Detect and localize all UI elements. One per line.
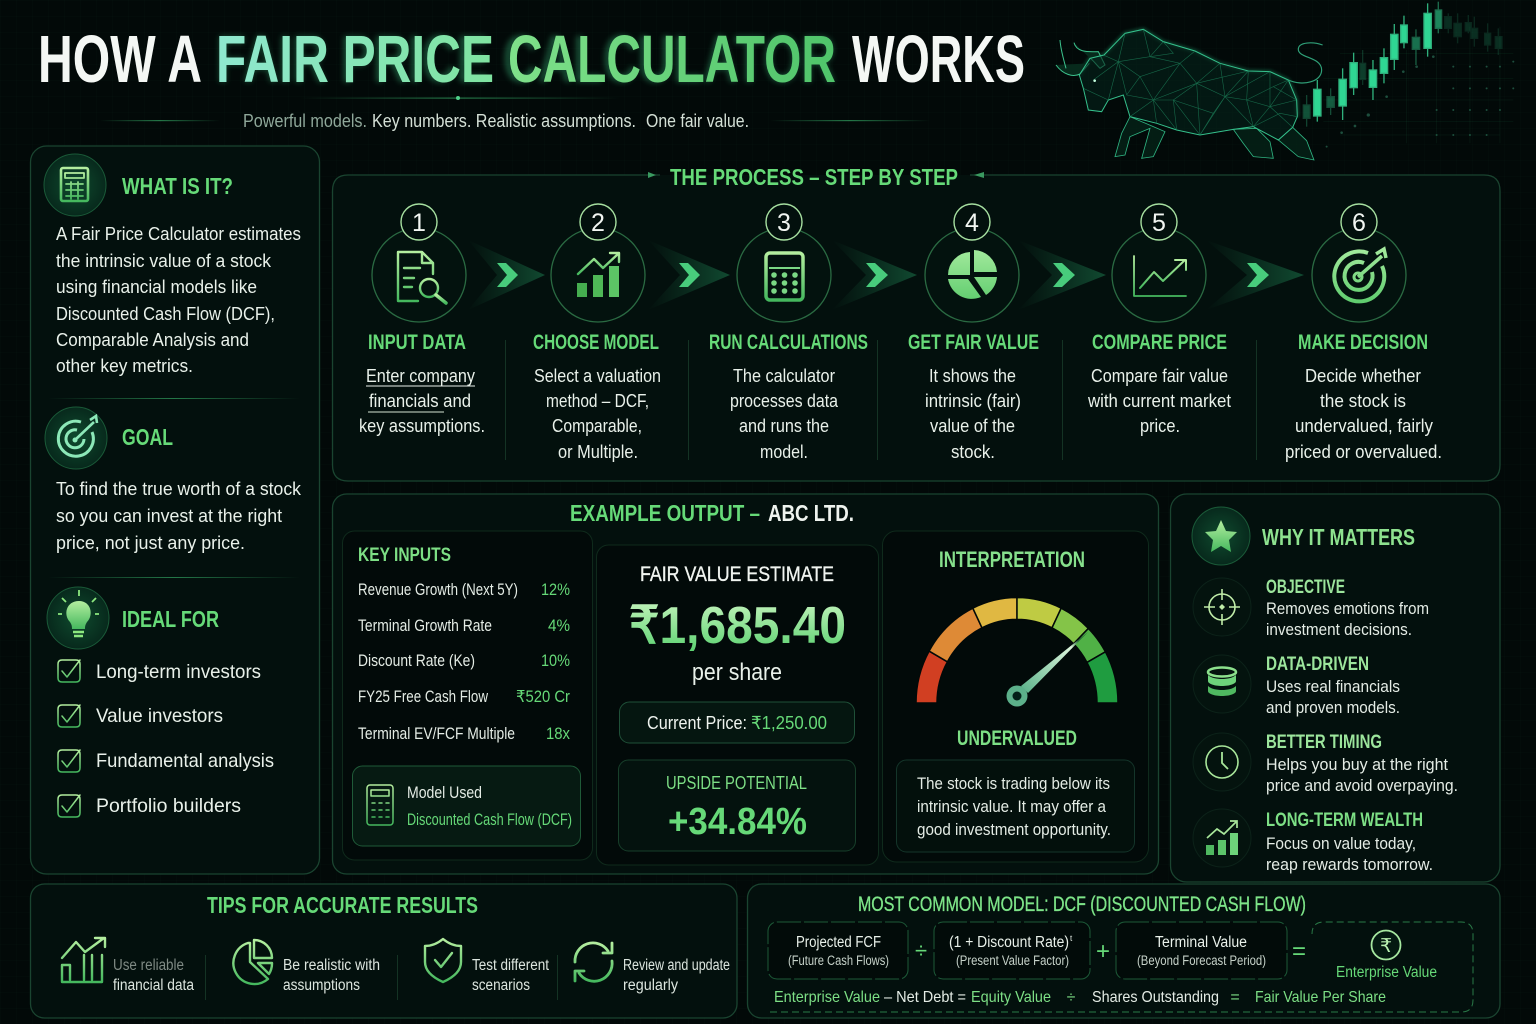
panel: why it matters: WHY IT MATTERS [1262,524,1415,550]
sub-panel: key inputs: KEY INPUTS [358,544,451,566]
sub-panel: key inputs [342,531,592,860]
card: interpretation: INTERPRETATION [939,547,1085,572]
step 2: choose model: Select a valuation [534,365,661,386]
title: WORKS [852,22,1025,97]
item: objective: Removes emotions from [1266,600,1429,618]
step 2: choose model: or Multiple. [558,441,638,462]
section: what is it: WHAT IS IT? [122,173,233,199]
sub-panel: key inputs: Discount Rate (Ke) [358,652,475,670]
step 3: run calculations: 3 [777,209,791,237]
step 3: run calculations: model. [760,441,808,462]
step 5: compare price: 5 [1152,209,1166,237]
checklist: ideal investors: Fundamental analysis [96,750,274,772]
icon: clock [1193,733,1251,791]
arrows between steps [468,240,1304,310]
formula line: fair value per share: – Net Debt = [884,989,966,1006]
checklist: ideal investors: Value investors [96,705,223,727]
checklist: ideal investors: Long-term investors [96,661,261,683]
tip: reliable data: Use reliable [113,957,184,974]
icon: target [45,407,107,469]
formula box: terminal value [1116,922,1287,979]
item: objective: OBJECTIVE [1266,577,1345,598]
icon: target with arrow [1334,249,1386,301]
item: long-term wealth [1193,809,1433,874]
step 1: input data: key assumptions. [359,415,485,436]
item: long-term wealth: Focus on value today, [1266,835,1416,853]
step 2: choose model: method – DCF, [546,390,649,411]
icon: database [1193,655,1251,713]
item: data-driven: Uses real financials [1266,678,1400,696]
item: data-driven: DATA-DRIVEN [1266,654,1369,675]
item: better timing [1193,732,1458,795]
section: what is it: Comparable Analysis and [56,329,249,350]
step 5: compare price: Compare fair value [1091,365,1228,386]
item: better timing: BETTER TIMING [1266,732,1382,753]
section: goal: price, not just any price. [56,532,245,553]
section: goal: To find the true worth of a stock [56,478,302,499]
icon: growth bars [1193,809,1251,867]
formula box: discount rate [934,922,1090,979]
tip: test scenarios: scenarios [472,977,530,994]
formula line: fair value per share [774,989,1386,1006]
step 2: choose model: CHOOSE MODEL [533,331,659,354]
formula line: fair value per share: ÷ [1067,989,1076,1006]
icon: line chart [1134,256,1186,296]
card: interpretation [882,531,1148,862]
step 1: input data: 1 [412,209,426,237]
icon: calculator [766,253,803,300]
section: what is it: the intrinsic value of a stock [56,250,272,271]
card: fair value estimate: ₹1,685.40 [629,597,846,655]
formula box: projected fcf: Projected FCF [796,934,881,951]
icon: document with magnifier [398,252,446,303]
operator: divide: ÷ [915,938,927,963]
icon: shield [425,939,461,982]
callout: interpretation text: intrinsic value. It may offer a [917,797,1106,816]
step 2: choose model [533,204,661,462]
step 2: choose model: 2 [591,209,605,237]
checklist: ideal investors [58,660,274,817]
panel: most common model: MOST COMMON MODEL: DCF (DISCOUNTED CASH FLOW) [858,893,1306,916]
callout: interpretation text: The stock is trading below its [917,774,1110,793]
formula box: discount rate: (Present Value Factor) [956,953,1069,968]
step 6: make decision: MAKE DECISION [1298,331,1428,354]
card: model used: Model Used [407,784,482,802]
step 1: input data [359,204,485,436]
item: long-term wealth: reap rewards tomorrow. [1266,856,1433,874]
tip: test scenarios: Test different [472,957,550,974]
subtitle: Key numbers. Realistic assumptions. [372,110,636,131]
icon: crosshair [1193,578,1251,636]
formula line: fair value per share: Equity Value [971,989,1051,1006]
sub-panel: key inputs: ₹520 Cr [516,688,570,706]
step 4: get fair value: value of the [930,415,1015,436]
tip: review regularly: Review and update [623,957,730,974]
card: fair value estimate: per share [692,659,782,686]
section: goal: GOAL [122,424,173,450]
sub-panel: key inputs: Terminal Growth Rate [358,617,492,635]
title: HOW A [38,22,202,97]
section: goal [45,407,302,553]
section: what is it: Discounted Cash Flow (DCF), [56,303,275,324]
subtitle: Powerful models. [243,110,367,131]
step 3: run calculations [709,204,868,462]
formula box: terminal value: (Beyond Forecast Period) [1137,953,1266,968]
sub-panel: key inputs: 4% [548,617,570,635]
operator: equals: = [1292,938,1306,965]
formula box: projected fcf: (Future Cash Flows) [788,953,889,968]
section: what is it [44,154,301,376]
callout: interpretation text: good investment opportunity. [917,820,1111,839]
card: fair value estimate [596,545,878,865]
step 5: compare price: price. [1140,415,1180,436]
section: ideal for: IDEAL FOR [122,606,219,632]
formula line: fair value per share: Fair Value Per Share [1255,989,1386,1006]
section: what is it: using financial models like [56,276,257,297]
formula line: fair value per share: Shares Outstanding [1092,989,1219,1006]
step 6: make decision: the stock is [1320,390,1406,411]
title: FAIR PRICE CALCULATOR [216,22,836,97]
step 4: get fair value: 4 [965,209,979,237]
icon: refresh [575,943,612,981]
step 1: input data: INPUT DATA [368,331,466,354]
current price: ₹1,250.00 [751,713,827,733]
card: model used [352,766,580,846]
result: enterprise value: Enterprise Value [1336,964,1437,981]
sub-panel: key inputs: 18x [546,725,571,743]
item: better timing: price and avoid overpaying. [1266,777,1458,795]
callout: interpretation text [896,760,1134,852]
formula box: discount rate: t [1070,934,1073,943]
operator: plus: + [1096,938,1110,965]
tip: realistic assumptions: Be realistic with [283,957,380,974]
step 6: make decision [1285,204,1442,462]
step 3: run calculations: processes data [730,390,839,411]
tip: review regularly: regularly [623,977,678,994]
step 4: get fair value: GET FAIR VALUE [908,331,1039,354]
section: goal: so you can invest at the right [56,505,282,526]
tip: realistic assumptions [233,940,380,994]
step 5: compare price: with current market [1087,390,1231,411]
heading: the process: THE PROCESS – STEP BY STEP [670,164,958,190]
item: objective [1193,577,1429,639]
step 6: make decision: 6 [1352,209,1366,237]
icon: star [1192,507,1250,565]
step 2: choose model: Comparable, [552,415,642,436]
sub-panel: key inputs: Revenue Growth (Next 5Y) [358,581,518,599]
title: CALCULATOR [508,22,836,97]
step 3: run calculations: and runs the [739,415,829,436]
current price: Current Price: [647,713,747,733]
result: enterprise value: ₹ [1380,936,1392,957]
item: objective: investment decisions. [1266,621,1412,639]
step 1: input data: Enter company [366,365,476,386]
tip: reliable data: financial data [113,977,194,994]
step 5: compare price: COMPARE PRICE [1092,331,1227,354]
step 6: make decision: priced or overvalued. [1285,441,1442,462]
upside potential: +34.84% [668,801,807,843]
gauge [916,597,1118,706]
current price [620,702,854,743]
result: enterprise value [1336,930,1437,981]
item: data-driven: and proven models. [1266,699,1400,717]
formula box: projected fcf [768,922,908,979]
heading: example output: EXAMPLE OUTPUT – [570,500,760,526]
tip: test scenarios [425,939,550,994]
step 4: get fair value: It shows the [929,365,1016,386]
step 3: run calculations: RUN CALCULATIONS [709,331,868,354]
tip: realistic assumptions: assumptions [283,977,360,994]
step 4: get fair value [908,204,1039,462]
title: FAIR PRICE [216,22,494,97]
upside potential: UPSIDE POTENTIAL [666,772,807,793]
upside potential [618,760,856,851]
panel: most common model [748,884,1500,1018]
icon: light bulb [47,587,109,649]
formula line: fair value per share: = [1230,989,1240,1006]
step 5: compare price [1087,204,1231,436]
step 4: get fair value: intrinsic (fair) [925,390,1021,411]
tip: review regularly [575,943,730,994]
step 3: run calculations: The calculator [733,365,835,386]
step 1: input data: financials and [369,390,471,411]
section: ideal for [47,587,274,817]
illustration: wireframe bull with candlesticks [1056,2,1514,160]
formula box: discount rate: (1 + Discount Rate) [949,934,1069,951]
card: fair value estimate: FAIR VALUE ESTIMATE [640,563,834,586]
panel: why it matters [1170,494,1500,882]
item: long-term wealth: LONG-TERM WEALTH [1266,810,1423,831]
section: what is it: A Fair Price Calculator estimates [56,223,301,244]
checklist: ideal investors: Portfolio builders [96,795,241,817]
formula box: terminal value: Terminal Value [1155,934,1247,951]
sub-panel: key inputs: 12% [541,581,570,599]
step 4: get fair value: stock. [951,441,995,462]
panel: example output [332,494,1158,874]
step 6: make decision: Decide whether [1305,365,1421,386]
tip: reliable data [62,938,194,994]
subtitle: One fair value. [646,110,749,131]
panel: left column [30,146,320,874]
card: model used: Discounted Cash Flow (DCF) [407,811,572,829]
heading: example output: ABC LTD. [768,500,854,526]
sub-panel: key inputs: 10% [541,652,570,670]
subtitle [100,96,930,131]
sub-panel: key inputs: FY25 Free Cash Flow [358,688,488,706]
panel: the process [332,164,1500,481]
formula line: fair value per share: Enterprise Value [774,989,880,1006]
item: better timing: Helps you buy at the right [1266,756,1448,774]
icon: bar chart with arrow [577,253,619,297]
icon: pie chart [233,940,272,984]
panel: tips for accurate results: TIPS FOR ACCURATE RESULTS [207,892,478,918]
icon: chart [62,938,105,982]
section: what is it: other key metrics. [56,355,193,376]
sub-panel: key inputs: Terminal EV/FCF Multiple [358,725,515,743]
card: interpretation: UNDERVALUED [957,727,1077,750]
item: data-driven [1193,654,1400,717]
icon: calculator [44,154,106,216]
icon: pie chart [948,250,997,299]
step 6: make decision: undervalued, fairly [1295,415,1434,436]
panel: tips for accurate results [30,884,737,1018]
